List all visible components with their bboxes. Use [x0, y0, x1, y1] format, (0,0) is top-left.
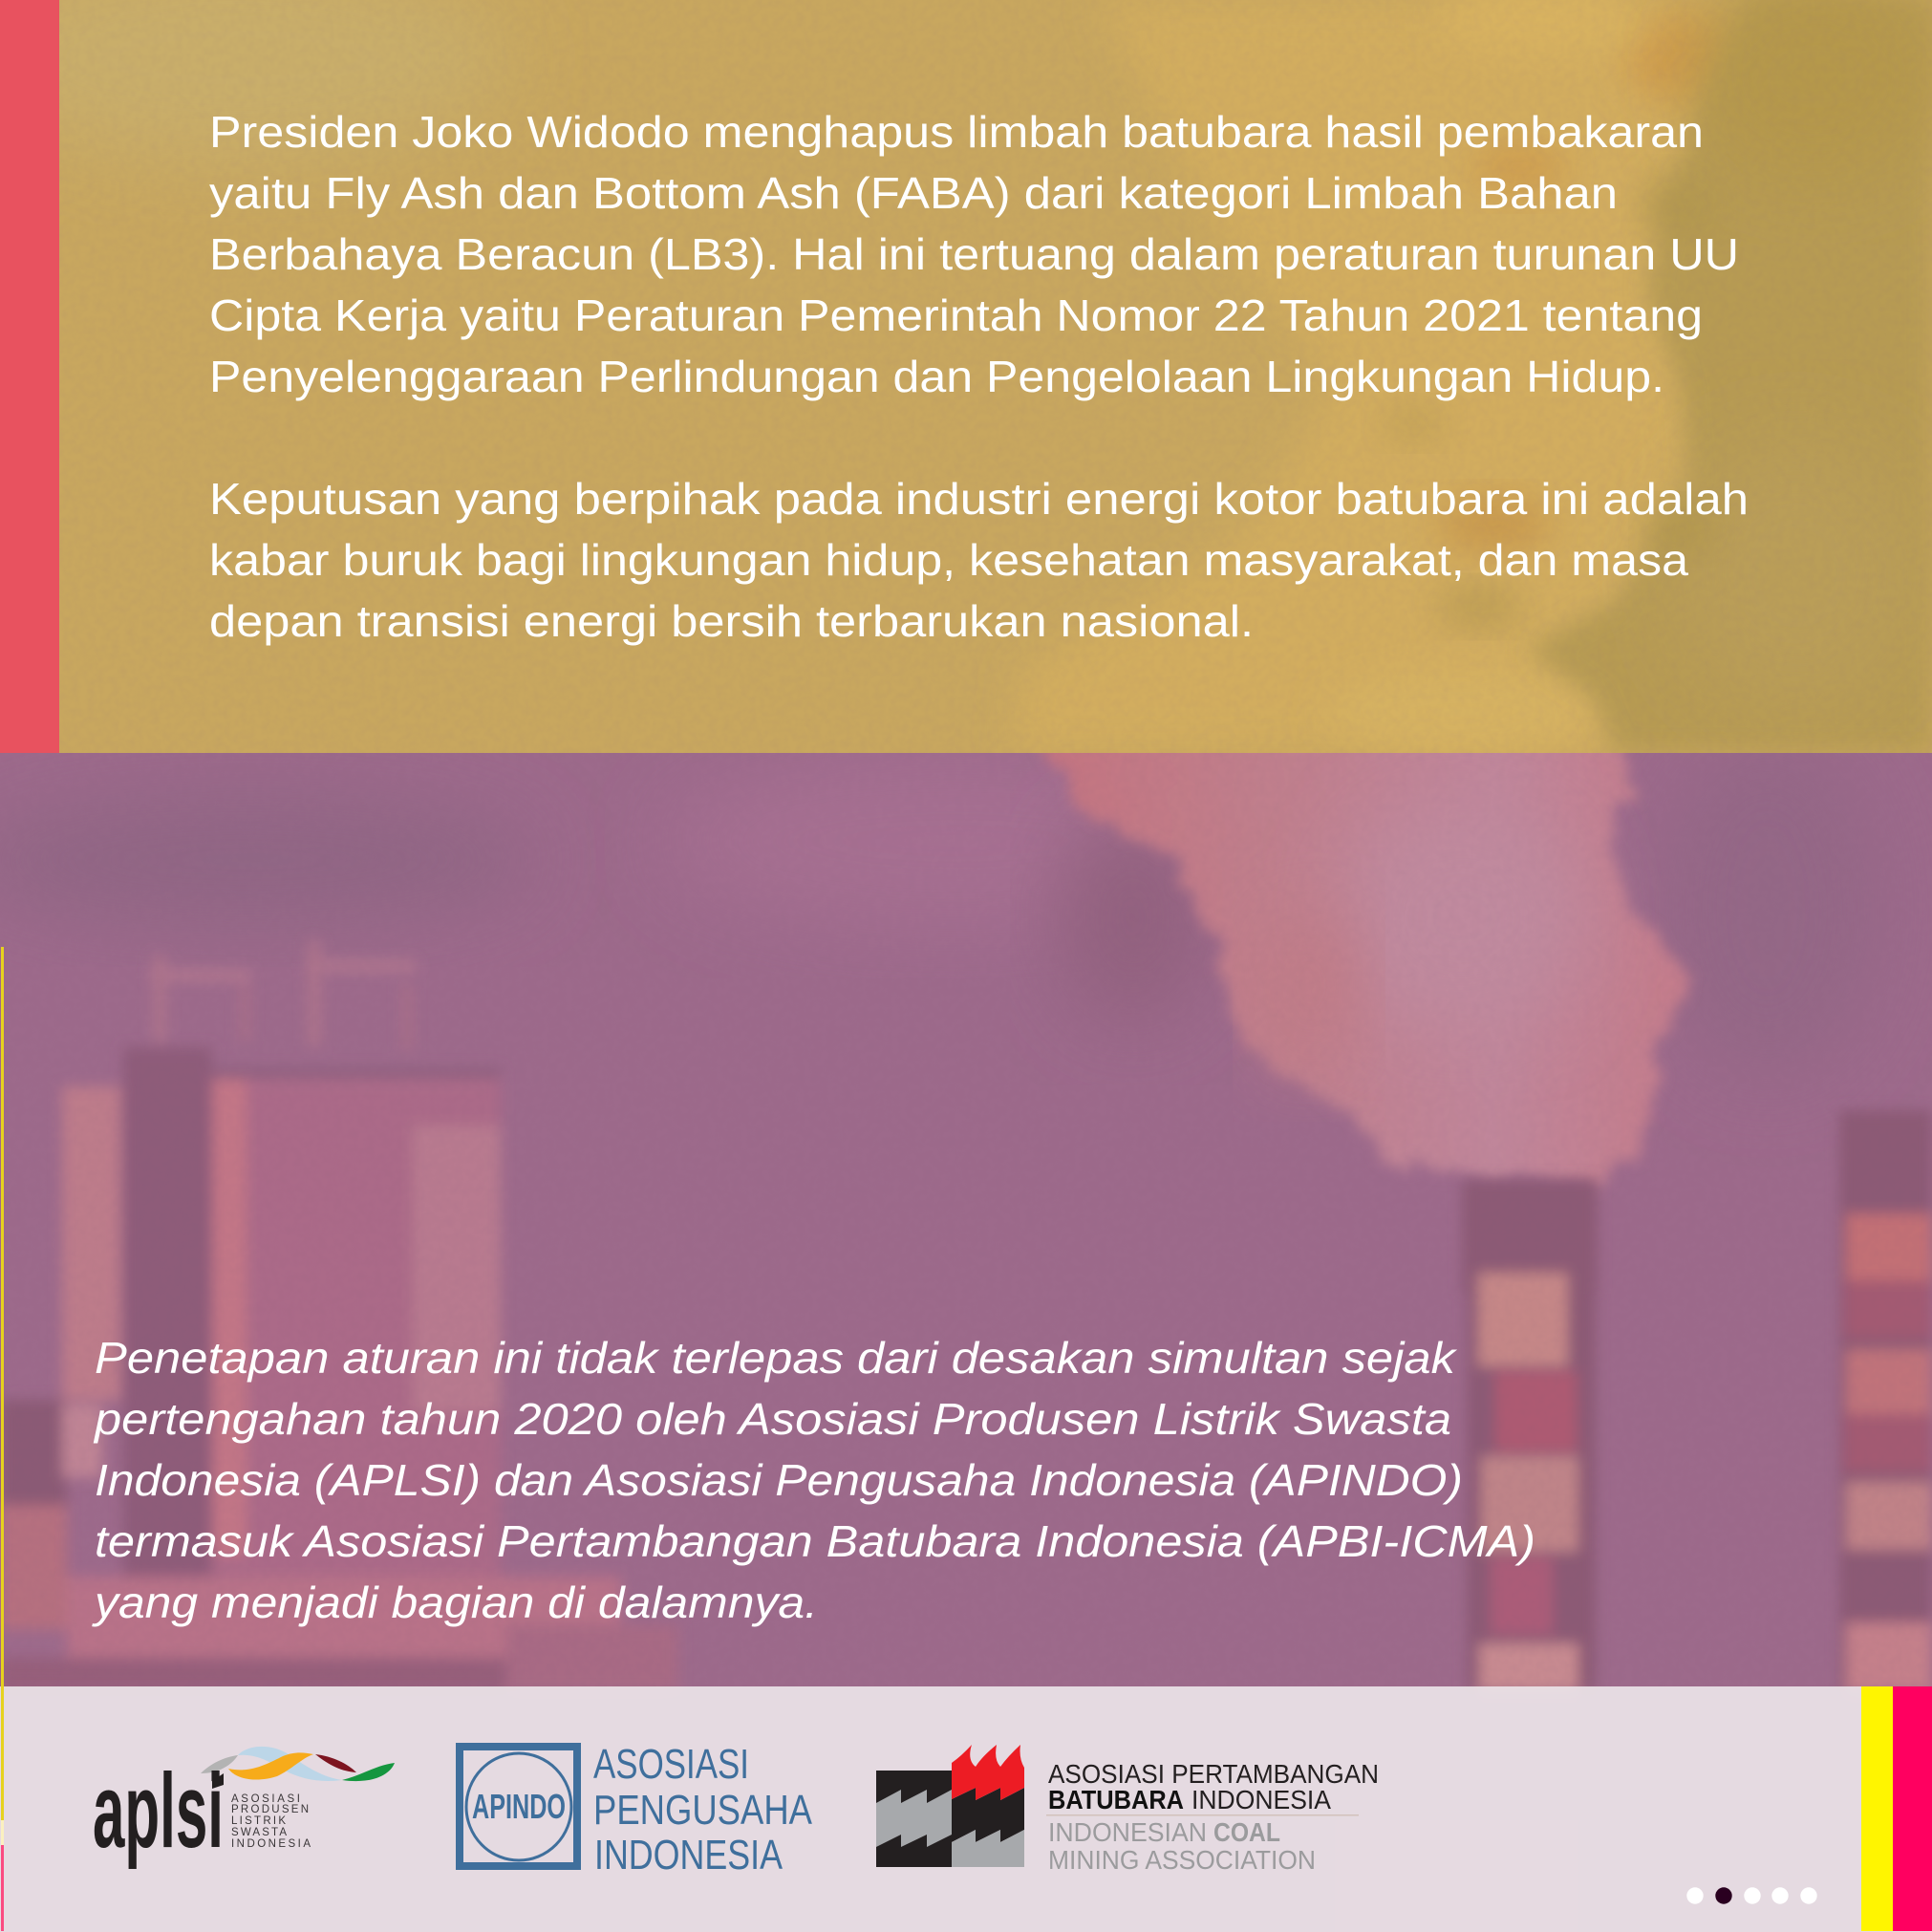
panel: logo footer — [0, 1686, 1932, 1932]
text block: italic statement: Indonesia (APLSI) dan Asosiasi Pengusaha Indonesia (APINDO) — [95, 1455, 1463, 1505]
text block: main paragraphs: Cipta Kerja yaitu Peraturan Pemerintah Nomor 22 Tahun 2021 tentang — [209, 290, 1703, 340]
logo: APLSI: INDONESIA — [231, 1838, 311, 1850]
logo: APBI-ICMA: ASOSIASI PERTAMBANGAN — [1048, 1759, 1379, 1789]
text block: main paragraphs: yaitu Fly Ash dan Bottom Ash (FABA) dari kategori Limbah Bahan — [209, 168, 1618, 218]
panel: left red bar — [0, 0, 59, 753]
text block: italic statement: Penetapan aturan ini tidak terlepas dari desakan simultan sejak — [95, 1333, 1457, 1383]
text block: main paragraphs: Penyelenggaraan Perlindungan dan Pengelolaan Lingkungan Hidup. — [209, 352, 1664, 401]
text block: main paragraphs: Presiden Joko Widodo menghapus limbah batubara hasil pembakaran — [209, 107, 1704, 157]
logo: APBI-ICMA — [876, 1745, 1379, 1875]
logo: APINDO: PENGUSAHA — [593, 1787, 813, 1834]
logo: APLSI: PRODUSEN — [231, 1804, 309, 1815]
logo: APINDO: APINDO — [472, 1787, 566, 1826]
text block: italic statement: termasuk Asosiasi Pertambangan Batubara Indonesia (APBI-ICMA) — [95, 1516, 1535, 1566]
logo: APINDO: INDONESIA — [594, 1832, 784, 1878]
text block: italic statement — [92, 1333, 1535, 1627]
centre chimney — [1462, 1179, 1598, 1691]
logo: APINDO — [460, 1741, 813, 1878]
text block: italic statement: pertengahan tahun 2020 oleh Asosiasi Produsen Listrik Swasta — [93, 1394, 1451, 1444]
text block: main paragraphs: Keputusan yang berpihak pada industri energi kotor batubara ini adalah — [209, 474, 1749, 524]
logo: APBI-ICMA: COAL — [1213, 1817, 1280, 1847]
accent bar: pink — [1893, 1686, 1932, 1931]
text block: main paragraphs — [209, 107, 1749, 646]
logo: APBI-ICMA: INDONESIAN — [1048, 1817, 1207, 1847]
smoke plume — [1037, 736, 1691, 1180]
page indicator dots — [1686, 1887, 1817, 1904]
text block: main paragraphs: kabar buruk bagi lingkungan hidup, kesehatan masyarakat, dan masa — [209, 535, 1688, 585]
left edge strip — [1, 947, 4, 1931]
text block: main paragraphs: Berbahaya Beracun (LB3). Hal ini tertuang dalam peraturan turunan UU — [209, 229, 1739, 279]
logo: APBI-ICMA: BATUBARA — [1048, 1785, 1184, 1814]
logo: APLSI: aplsi — [93, 1752, 224, 1870]
logo: APLSI: SWASTA — [231, 1827, 287, 1838]
logo: APBI-ICMA: INDONESIA — [1191, 1785, 1331, 1814]
left plant — [0, 941, 678, 1691]
panel: gold text band — [0, 0, 1932, 755]
right chimney — [1839, 1110, 1932, 1691]
logo: APLSI: ASOSIASI — [231, 1793, 300, 1805]
background photo: power plant in purple tint — [0, 753, 1932, 1686]
text block: main paragraphs: depan transisi energi bersih terbarukan nasional. — [209, 596, 1254, 646]
text block: italic statement: yang menjadi bagian di dalamnya. — [92, 1578, 818, 1627]
logo: APLSI: LISTRIK — [231, 1815, 286, 1827]
logo: APBI-ICMA: MINING ASSOCIATION — [1048, 1845, 1316, 1875]
accent bar: yellow — [1861, 1686, 1893, 1931]
logo: APINDO: ASOSIASI — [593, 1741, 749, 1788]
